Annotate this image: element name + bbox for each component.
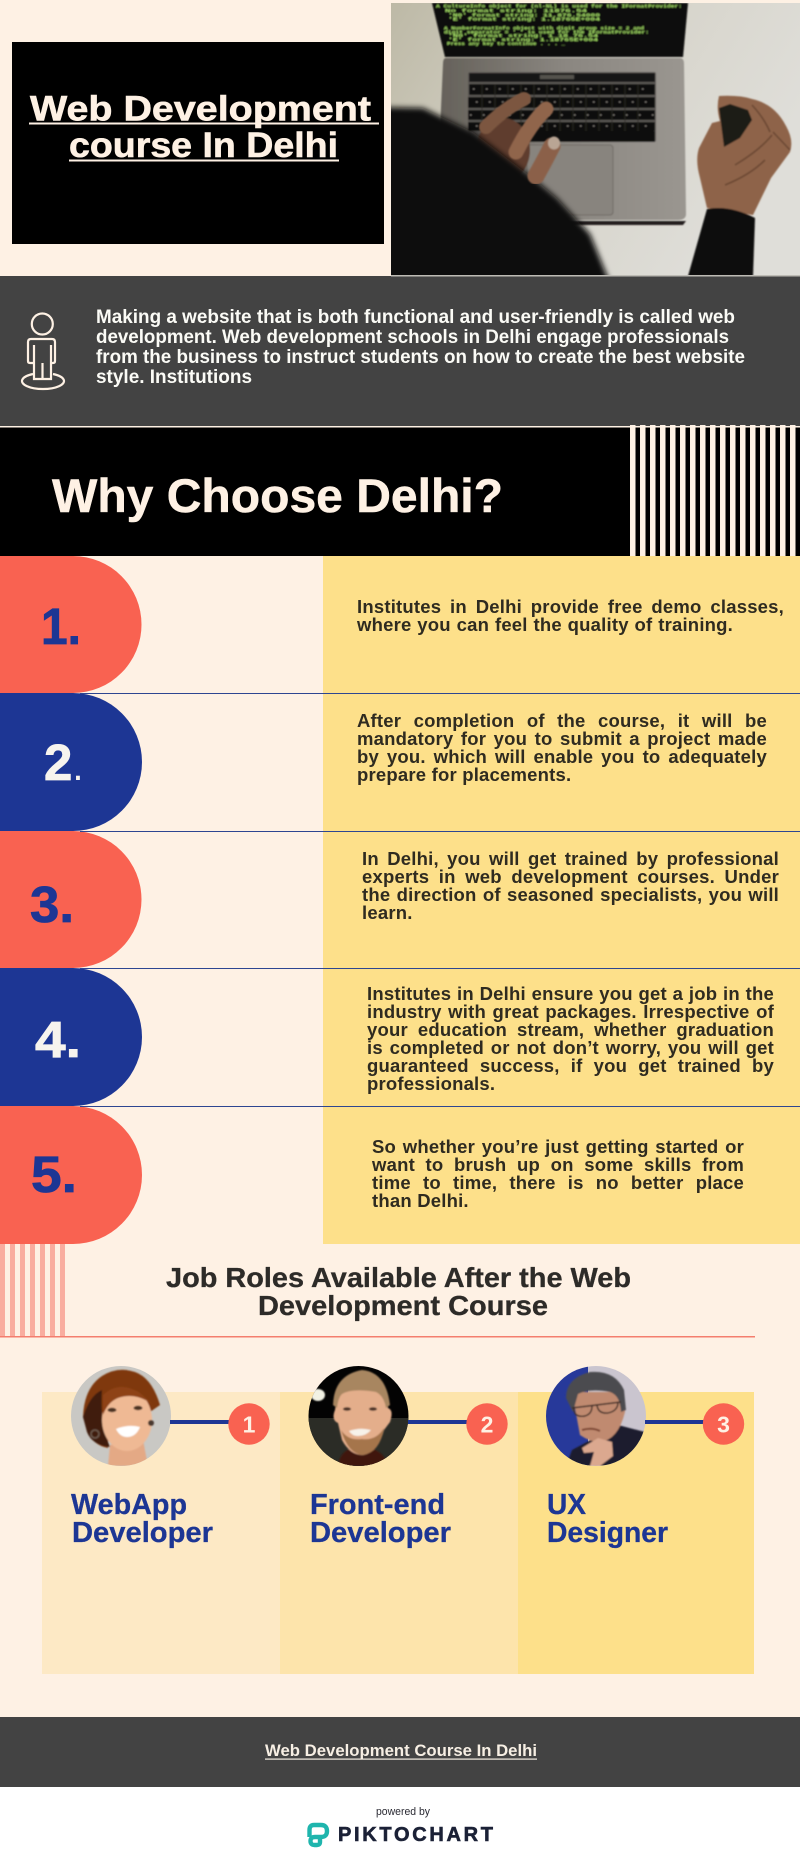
row 2 text: mandatory for you to submit a project made bbox=[357, 728, 767, 748]
laptop screen: A CultureInfo object for (nl-NL) is used for the IFormatProvider: bbox=[436, 4, 682, 10]
row 4 text: professionals. bbox=[367, 1072, 495, 1094]
laptop screen: No format string: 11876.54 bbox=[445, 8, 587, 14]
connector bbox=[408, 1420, 468, 1424]
row 2 text: After completion of the course, it will be bbox=[357, 710, 767, 730]
badge 1: 1 bbox=[243, 1412, 256, 1438]
row 3 text: the direction of seasoned specialists, you will bbox=[362, 884, 779, 904]
row 1 pill and number bbox=[0, 556, 142, 693]
badge 1 bbox=[228, 1403, 270, 1445]
title box bbox=[12, 42, 384, 244]
laptop screen: 'E' format string: 1.18765E+004 bbox=[448, 16, 600, 22]
role title: WebApp bbox=[71, 1489, 187, 1521]
row 3 pill and number: 3. bbox=[30, 876, 74, 933]
role title: Front-end bbox=[310, 1489, 445, 1521]
left hand back bbox=[478, 118, 530, 172]
row 5 text: want to brush up on some skills from bbox=[372, 1154, 744, 1174]
role title bbox=[71, 1489, 213, 1549]
yellow column bbox=[323, 556, 800, 1244]
laptop screen: 'N0' format string: 11,876.54000 bbox=[448, 12, 600, 18]
role card 2 bbox=[280, 1366, 518, 1674]
right hand bbox=[697, 96, 791, 215]
laptop screen: Press any key to continue . . . _ bbox=[447, 41, 565, 47]
role card 3 bbox=[518, 1366, 754, 1674]
footer band: Web Development Course In Delhi bbox=[265, 1742, 537, 1760]
row 2 text: by you. which will enable you to adequately bbox=[357, 746, 767, 766]
row 4 text bbox=[367, 982, 774, 1094]
row 1 text: Institutes in Delhi provide free demo classes, bbox=[357, 596, 784, 616]
powered by piktochart bbox=[0, 1787, 800, 1867]
intro text: development. Web development schools in Delhi engage professionals bbox=[96, 326, 729, 348]
connector bbox=[645, 1420, 705, 1424]
title text bbox=[29, 90, 379, 165]
row 2 text bbox=[357, 710, 767, 785]
laptop base bbox=[440, 58, 686, 220]
heading: why choose delhi: Why Choose Delhi? bbox=[52, 469, 503, 522]
row 4 text: industry with great packages. Irrespective of bbox=[367, 1000, 774, 1022]
trackpad bbox=[527, 145, 613, 215]
portrait: man bbox=[308, 1366, 409, 1466]
icon: piktochart logo bbox=[310, 1825, 327, 1845]
row 3 text bbox=[362, 848, 779, 922]
badge 2: 2 bbox=[481, 1412, 493, 1438]
row 4 pill and number: 4. bbox=[35, 1011, 81, 1068]
intro band bbox=[0, 275, 800, 426]
badge 2 bbox=[466, 1403, 508, 1445]
laptop screen: 'N0' format string: 1_18_76.54 bbox=[448, 33, 598, 39]
icon: person on base bbox=[22, 314, 64, 389]
row 2 pill and number bbox=[0, 693, 142, 831]
intro text: Making a website that is both functional and user-friendly is called web bbox=[96, 306, 735, 328]
title text: course In Delhi bbox=[69, 126, 338, 165]
job roles heading bbox=[166, 1262, 631, 1321]
row 2 pill and number: 2. bbox=[44, 734, 84, 791]
role title: UX bbox=[547, 1489, 587, 1521]
shoulder silhouette bbox=[391, 102, 612, 275]
connector bbox=[170, 1420, 230, 1424]
title text: Web Development bbox=[30, 90, 371, 128]
row 5 pill and number: 5. bbox=[31, 1146, 77, 1203]
row 4 text: is completed or not don’t worry, you will get bbox=[367, 1036, 774, 1058]
row 5 text: time to time, there is no better place bbox=[372, 1172, 744, 1192]
row 3 text: In Delhi, you will get trained by professional bbox=[362, 848, 779, 868]
role title: Designer bbox=[547, 1517, 668, 1549]
powered by piktochart: PIKTOCHART bbox=[338, 1824, 493, 1846]
intro text bbox=[96, 306, 745, 388]
job roles heading: Job Roles Available After the Web bbox=[166, 1262, 631, 1293]
row 3 text: learn. bbox=[362, 902, 413, 922]
left hand fingers bbox=[486, 99, 560, 176]
row 3 pill and number bbox=[0, 831, 142, 968]
badge 3: 3 bbox=[717, 1412, 730, 1438]
row 4 text: your education stream, whether graduation bbox=[367, 1018, 774, 1040]
role title: Developer bbox=[310, 1517, 451, 1549]
laptop screen: A NumberFormatInfo object with digit group size = 2 and bbox=[444, 26, 644, 32]
laptop screen bbox=[432, 3, 688, 57]
row 4 text: Institutes in Delhi ensure you get a job in the bbox=[367, 982, 774, 1004]
intro text: from the business to instruct students on how to create the best website bbox=[96, 346, 745, 368]
laptop screen: 'E' format string: 1.18765E+004 bbox=[448, 37, 598, 43]
row 3 text: experts in web development courses. Under bbox=[362, 866, 779, 886]
row 2 text: prepare for placements. bbox=[357, 764, 571, 784]
why choose delhi banner bbox=[0, 425, 800, 556]
row 5 text: So whether you’re just getting started or bbox=[372, 1136, 744, 1156]
row 5 text: than Delhi. bbox=[372, 1190, 469, 1210]
intro text: style. Institutions bbox=[96, 366, 252, 388]
role title: Developer bbox=[72, 1517, 213, 1549]
laptop screen: digit separator = '_' is used for the IFormatProvider: bbox=[444, 30, 649, 36]
keyboard bbox=[468, 72, 656, 142]
powered by piktochart: powered by bbox=[376, 1806, 430, 1818]
stripes bbox=[630, 425, 796, 556]
role card 1 bbox=[42, 1366, 280, 1674]
row 4 pill and number bbox=[0, 968, 142, 1106]
row 5 pill and number bbox=[0, 1106, 142, 1244]
row 4 text: guaranteed success, if you get trained by bbox=[367, 1054, 774, 1076]
portrait: woman bbox=[71, 1366, 171, 1466]
sleeve bbox=[688, 208, 755, 276]
row 1 text bbox=[357, 596, 784, 635]
photo: hands on laptop bbox=[370, 3, 800, 290]
row 1 pill and number: 1. bbox=[41, 598, 81, 655]
job roles stripes bbox=[0, 1244, 65, 1337]
portrait: man with glasses bbox=[545, 1366, 648, 1466]
role title bbox=[547, 1489, 668, 1549]
role title bbox=[310, 1489, 451, 1549]
job roles heading: Development Course bbox=[258, 1290, 548, 1321]
footer band bbox=[0, 1717, 800, 1787]
badge 3 bbox=[703, 1403, 744, 1445]
row 1 text: where you can feel the quality of training. bbox=[357, 614, 733, 634]
row 5 text bbox=[372, 1136, 744, 1210]
